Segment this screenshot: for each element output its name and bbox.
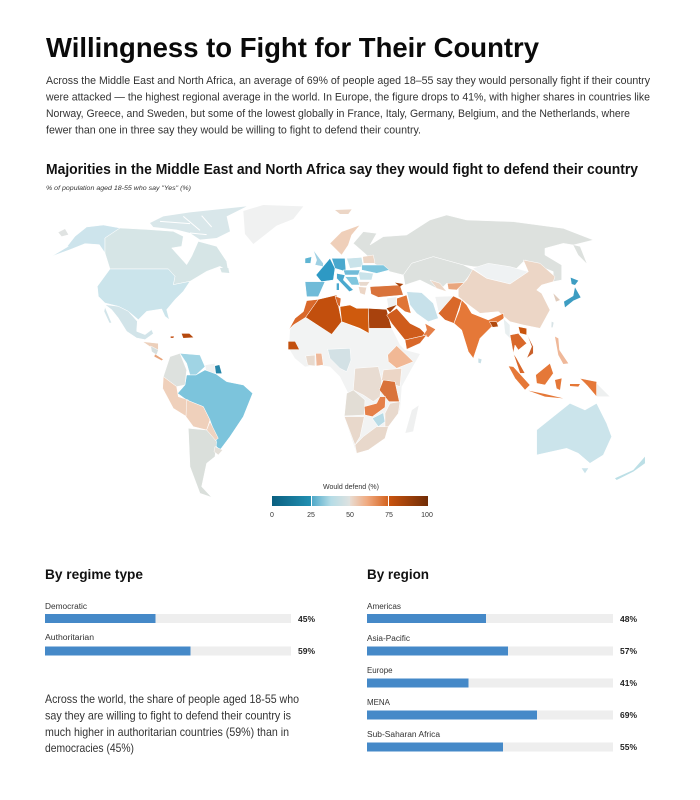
- bar: Americas 48%: 48%: [620, 614, 637, 624]
- legend colour ramp: [272, 496, 428, 506]
- bar: Europe 41%: [367, 666, 637, 688]
- panel: by regime type: [45, 567, 315, 755]
- region: South and East Asia: [430, 260, 610, 398]
- region: Central and South America: [143, 342, 253, 497]
- bar: Democratic 45%: [45, 602, 315, 624]
- region: Oceania: [537, 403, 645, 480]
- bar: Democratic 45%: Democratic: [45, 602, 87, 611]
- bar: Sub-Saharan Africa 55%: Sub-Saharan Africa: [367, 730, 441, 739]
- map subtitle: % of population aged 18-55 who say "Yes" (%): [46, 185, 191, 192]
- regime summary text: democracies (45%): [45, 741, 134, 755]
- bar: Authoritarian 59%: [45, 633, 315, 656]
- region: Africa and Middle East: [288, 283, 438, 453]
- bar: Democratic 45%: 45%: [298, 614, 315, 624]
- bar: Sub-Saharan Africa 55%: [367, 730, 637, 752]
- bar: Americas 48%: Americas: [367, 602, 401, 611]
- regime summary text: say they are willing to fight to defend their country is: [45, 708, 291, 722]
- regime summary text: much higher in authoritarian countries (59%) than in: [45, 725, 289, 739]
- legend ticks: 0: [270, 512, 274, 519]
- regime summary text: Across the world, the share of people aged 18-55 who: [45, 692, 299, 706]
- title: Willingness to Fight for Their Country: [46, 32, 539, 63]
- intro paragraph: fewer than one in three say they would be willing to fight to defend their country.: [46, 124, 421, 136]
- intro paragraph: [45, 75, 650, 136]
- bar: Asia-Pacific 57%: [367, 634, 637, 656]
- heading: by regime type: By regime type: [45, 567, 143, 582]
- regime summary text: [45, 692, 299, 755]
- world choropleth map: [52, 205, 645, 497]
- legend title: Would defend (%): [323, 484, 379, 491]
- bar: Americas 48%: [367, 602, 637, 624]
- bar: Europe 41%: Europe: [367, 666, 393, 675]
- bar: MENA 69%: MENA: [367, 698, 391, 707]
- intro paragraph: Across the Middle East and North Africa, an average of 69% of people aged 18–55 say they would personally fight if their country: [46, 75, 650, 87]
- legend ticks: 50: [346, 512, 354, 519]
- bar: Authoritarian 59%: Authoritarian: [45, 633, 94, 642]
- bar: Sub-Saharan Africa 55%: 55%: [620, 742, 637, 752]
- bar: Authoritarian 59%: 59%: [298, 646, 315, 656]
- region: Europe: [305, 209, 389, 297]
- intro paragraph: were attacked — the highest regional average in the world. In Europe, the figure drops to 41%, with higher shares in countries like: [45, 92, 650, 104]
- legend ticks: 75: [385, 512, 393, 519]
- bar: Europe 41%: 41%: [620, 678, 637, 688]
- panel: by region: [367, 567, 637, 752]
- region: North America: [52, 205, 303, 340]
- map heading: Majorities in the Middle East and North Africa say they would fight to defend their country: [46, 161, 639, 178]
- legend ticks: 25: [307, 512, 315, 519]
- intro paragraph: Norway, Greece, and Sweden, but some of the lowest globally in France, Italy, Germany, Belgium, and the Netherlands, where: [46, 108, 630, 120]
- legend ticks: 100: [421, 512, 433, 519]
- region: Russia and Central Asia: [353, 215, 593, 290]
- bar: Asia-Pacific 57%: 57%: [620, 646, 637, 656]
- bar: Asia-Pacific 57%: Asia-Pacific: [367, 634, 410, 643]
- legend ticks: [270, 512, 433, 519]
- heading: by region: By region: [367, 567, 429, 582]
- bar: MENA 69%: [367, 698, 637, 720]
- map legend: [270, 484, 433, 519]
- bar: MENA 69%: 69%: [620, 710, 637, 720]
